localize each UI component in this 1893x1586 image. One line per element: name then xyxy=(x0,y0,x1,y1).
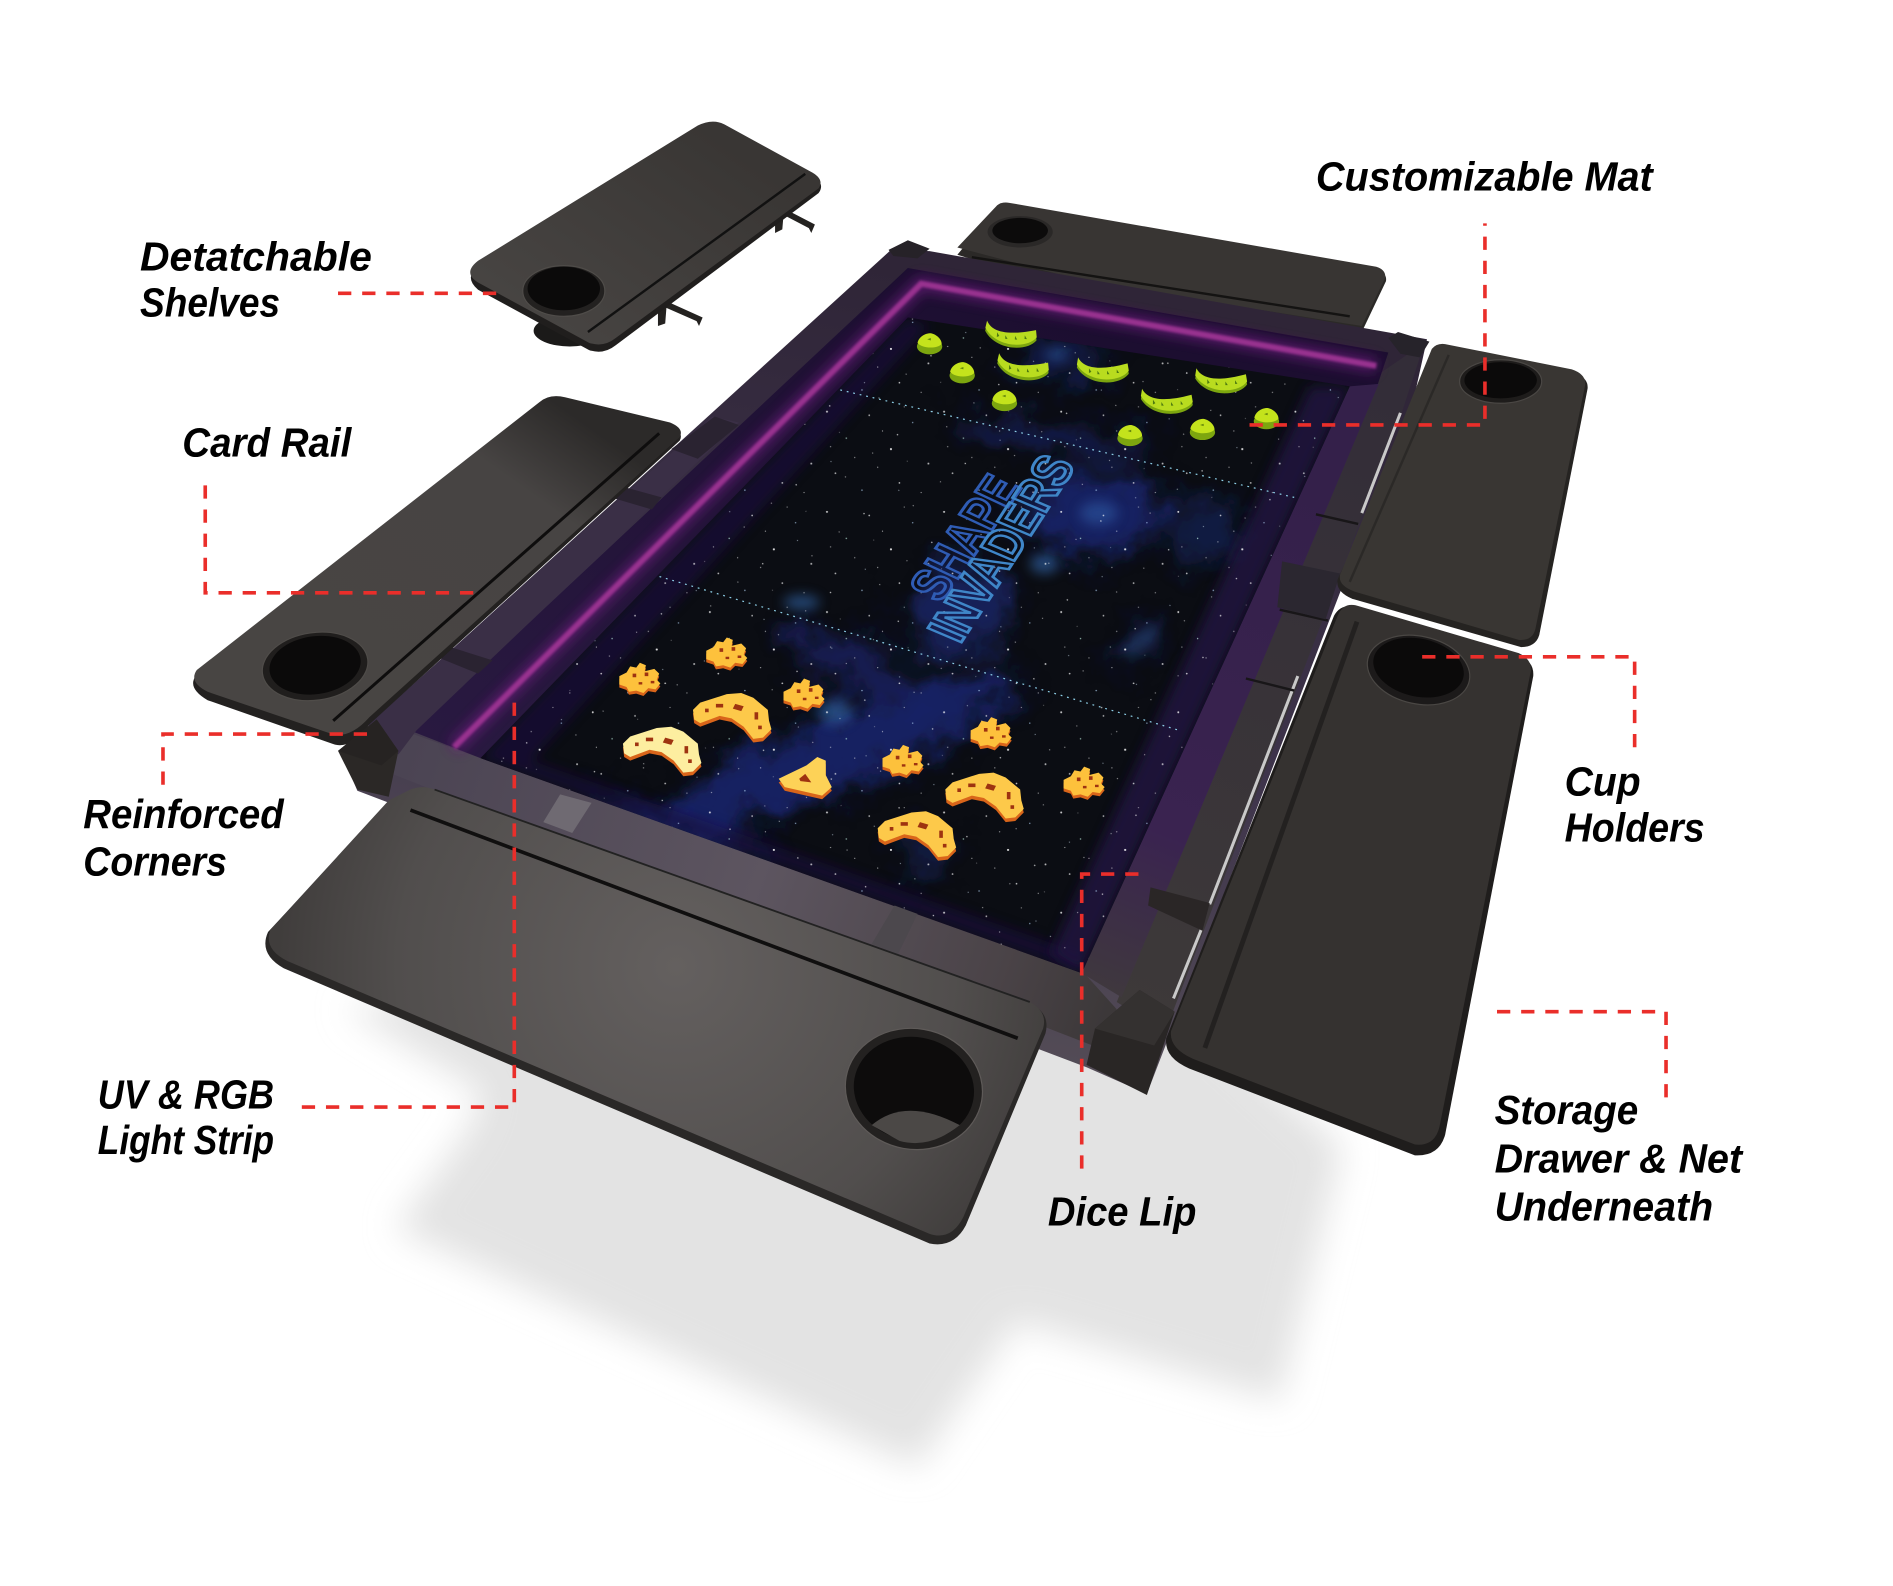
shelf: top right xyxy=(1337,344,1588,647)
leader: customizable mat xyxy=(1250,223,1485,425)
shelf: top xyxy=(957,203,1386,332)
orange game pieces xyxy=(619,637,1105,861)
dotted line: upper xyxy=(840,390,1294,497)
bottom rail xyxy=(389,734,1117,1046)
shelf: detachable xyxy=(470,122,821,352)
left rail xyxy=(368,417,739,755)
label: Cup Holders: Cup xyxy=(1565,759,1641,805)
green game pieces xyxy=(917,321,1279,446)
label: Storage Drawer & Net Underneath: Drawer & Net xyxy=(1495,1135,1744,1181)
infographic: gaming table diagram xyxy=(84,122,1744,1468)
table frame xyxy=(340,250,1427,1094)
shelf clips xyxy=(658,208,815,326)
label: Reinforced Corners xyxy=(83,791,285,884)
label: Card Rail: Card Rail xyxy=(182,419,353,465)
corner block: top left xyxy=(889,240,930,258)
callout leader lines xyxy=(163,223,1666,1169)
label: Reinforced Corners: Corners xyxy=(83,838,227,884)
neon glow xyxy=(454,284,1376,747)
cup holder: bottom right shelf xyxy=(1361,626,1476,714)
play mat xyxy=(459,302,1376,990)
label: Storage Drawer & Net Underneath: Underneath xyxy=(1495,1184,1713,1230)
nebula highlights xyxy=(784,350,1162,724)
mat logo: SHAPE xyxy=(898,467,1033,609)
rail tabs and slits xyxy=(543,413,1400,998)
right rail xyxy=(1117,343,1425,1032)
label: Customizable Mat: Customizable Mat xyxy=(1316,154,1655,200)
label: UV & RGB Light Strip: UV & RGB xyxy=(98,1071,274,1117)
label: UV & RGB Light Strip: Light Strip xyxy=(98,1117,274,1163)
label: Detatchable Shelves xyxy=(140,233,372,325)
label: Cup Holders: Holders xyxy=(1565,804,1705,850)
corner block: top right xyxy=(1388,332,1429,357)
leader: light strip xyxy=(302,700,514,1107)
label: Cup Holders xyxy=(1565,759,1705,850)
nebula xyxy=(576,343,1241,891)
mat logo xyxy=(898,447,1087,649)
floor shadow xyxy=(345,930,1342,1467)
leader: dice lip xyxy=(1082,874,1149,1169)
corner block: bottom right xyxy=(1087,990,1175,1095)
label: Reinforced Corners: Reinforced xyxy=(83,791,285,837)
cup holder: left shelf xyxy=(258,626,372,707)
label: Dice Lip: Dice Lip xyxy=(1048,1188,1196,1234)
shelf: left xyxy=(193,396,681,745)
label: Storage Drawer & Net Underneath: Storage xyxy=(1495,1087,1638,1133)
star field xyxy=(502,322,1337,959)
cup holder: bottom shelf xyxy=(836,1018,992,1160)
leader: card rail xyxy=(205,485,473,593)
leader: detachable shelves xyxy=(338,292,501,295)
purple lip right xyxy=(1082,384,1379,997)
shelf: bottom right xyxy=(1166,605,1533,1155)
cup holder: detachable shelf xyxy=(523,266,605,316)
cup holder: top right shelf xyxy=(1460,360,1542,403)
leader: cup holders xyxy=(1422,657,1635,751)
cup holder: top shelf xyxy=(988,216,1053,247)
label: Storage Drawer & Net Underneath xyxy=(1495,1087,1744,1230)
label: UV & RGB Light Strip xyxy=(98,1071,274,1163)
leader: reinforced corners xyxy=(163,734,374,785)
dotted line: lower xyxy=(653,575,1180,730)
mat logo: INVADERS xyxy=(917,447,1087,649)
inner well xyxy=(413,268,1388,995)
leader: storage drawer xyxy=(1497,1012,1666,1105)
label: Detatchable Shelves: Detatchable xyxy=(140,233,372,279)
shelf: bottom xyxy=(265,787,1047,1244)
neon light strip xyxy=(454,284,1376,747)
purple mat edges xyxy=(480,318,1082,973)
corner block: bottom left xyxy=(338,720,398,797)
label: Detatchable Shelves: Shelves xyxy=(140,279,280,325)
